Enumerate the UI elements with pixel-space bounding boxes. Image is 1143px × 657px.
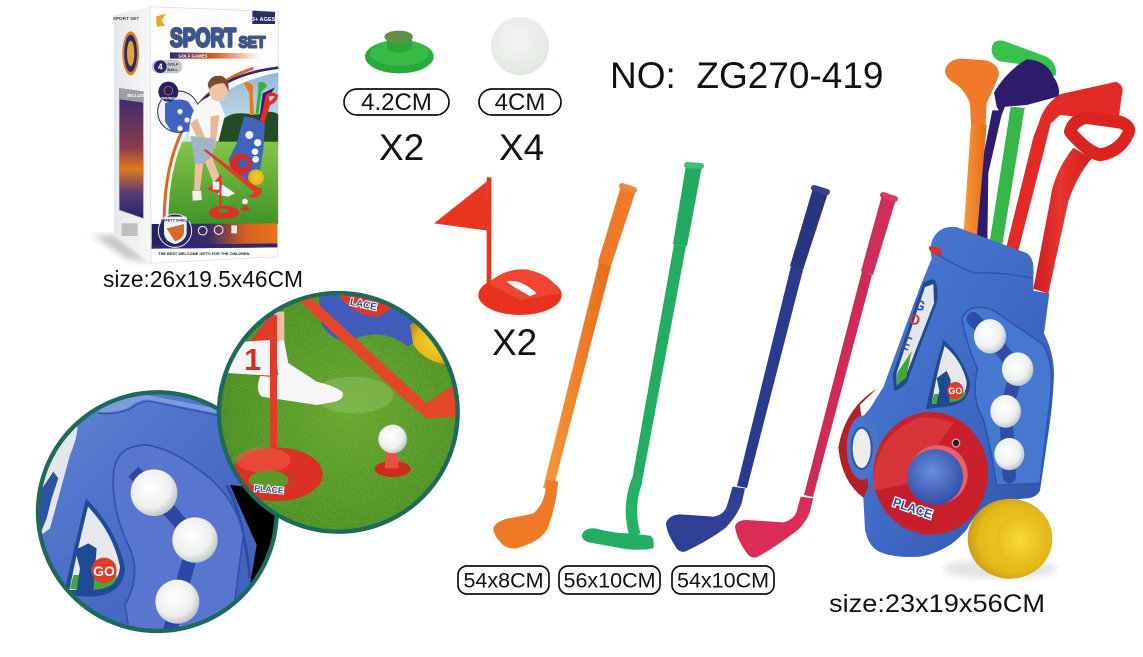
title: SPORT [170, 23, 236, 53]
loose club: green [582, 165, 702, 550]
go sticker: GO [93, 563, 115, 579]
mini flag [207, 175, 250, 219]
golf sticker: F [899, 339, 911, 357]
product box: 4 [158, 62, 163, 72]
detail circle: putting on grass [217, 292, 460, 535]
subtitle bar [170, 52, 260, 59]
pill: 4.2CM [344, 89, 449, 116]
tee and ball [375, 425, 411, 477]
loose club: crimson [735, 195, 896, 558]
loose club: navy [666, 188, 828, 552]
brand tag [928, 244, 944, 257]
title: SET [239, 35, 266, 52]
balls count pill [152, 60, 182, 73]
box size label: size:26x19.5x46CM [103, 266, 303, 292]
detail circle: putting on grass: 1 [244, 343, 261, 377]
quantity X2 flag: X2 [492, 322, 537, 363]
rear wheel [838, 389, 879, 498]
product box: BALL [167, 67, 179, 72]
go sticker: GO [948, 386, 962, 396]
red target disc: PLACE [891, 495, 934, 522]
ball track [962, 307, 1051, 485]
go sticker [926, 340, 970, 409]
spinner inset [158, 82, 199, 132]
yellow wheel [968, 499, 1052, 579]
product box: GOLF GAMES [178, 53, 208, 58]
detail circle: putting on grass: PLACE [254, 483, 284, 496]
product box: GOLF [167, 62, 179, 67]
bag base [318, 295, 414, 346]
bag body [848, 227, 1054, 557]
ball track [113, 445, 243, 638]
quantity X2: X2 [379, 127, 424, 168]
red club [203, 149, 262, 198]
logo [156, 13, 166, 27]
scene [168, 72, 278, 224]
left sticker [42, 426, 78, 534]
go sticker [63, 498, 125, 597]
red target disc [873, 412, 988, 535]
loose club: orange [493, 186, 636, 548]
product box: INCLUDE [127, 93, 147, 98]
pill: 4.2CM: 4.2CM [361, 89, 432, 116]
age badge [252, 11, 275, 24]
feature icons [198, 225, 237, 235]
pill: 4CM [479, 89, 561, 116]
pill: 4CM: 4CM [495, 89, 545, 116]
bag handle [1033, 117, 1129, 293]
spinner inset: SPINNER [161, 97, 176, 101]
safety badge [158, 214, 192, 247]
golf bag with clubs [838, 40, 1129, 579]
flag [238, 317, 278, 377]
box slogan: THE BEST WELCOME GIFTS FOR THE CHILDREN [158, 252, 250, 256]
box side label: SPORT SET [113, 16, 139, 21]
pill: 56x10CM: 56x10CM [563, 568, 656, 592]
pill: 54x10CM: 54x10CM [677, 568, 769, 592]
detail circle: putting on grass: LACE [349, 297, 378, 313]
red flag [434, 177, 562, 315]
bag clubs [945, 40, 1123, 254]
bottom band [152, 223, 277, 249]
detail circle: golf bag balls [36, 390, 279, 634]
bag size label: size:23x19x56CM [829, 590, 1045, 618]
golf sticker: O [908, 310, 923, 329]
golf ball [491, 17, 549, 75]
model number: NO: ZG270-419 [610, 55, 884, 96]
bag balls [974, 319, 1033, 470]
boy [189, 76, 235, 201]
golf sticker: G [913, 295, 927, 315]
safety badge: SAFETY SHIELD [161, 219, 190, 223]
product box: 3+ AGES [252, 17, 276, 23]
golf sticker: L [904, 324, 916, 343]
small bag [228, 82, 278, 185]
pill: 54x8CM: 54x8CM [463, 568, 544, 592]
quantity X4: X4 [499, 127, 544, 168]
hole ring [232, 448, 323, 501]
club [300, 297, 458, 418]
product box [93, 7, 278, 263]
green tee [365, 31, 434, 73]
leg and shoe [274, 312, 284, 345]
golf sticker [893, 279, 938, 391]
